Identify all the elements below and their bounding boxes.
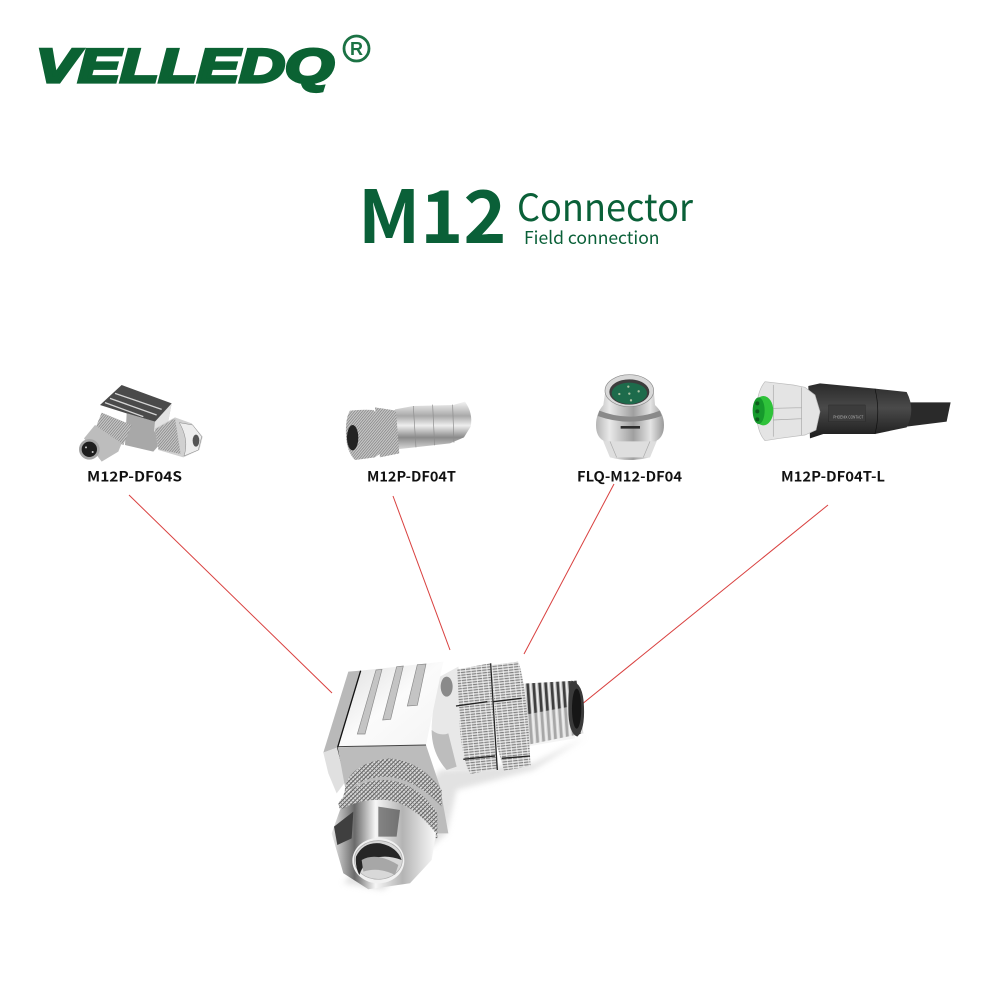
title: M12 Connector	[358, 159, 693, 265]
product: M12P-DF04T-L	[753, 382, 951, 486]
housing top	[338, 662, 443, 747]
gland opening	[352, 838, 404, 883]
title: M12 Connector: Connector	[517, 177, 693, 232]
line to FLQ-M12-DF04	[524, 484, 614, 654]
image: cable connector: PHOENIX CONTACT	[833, 414, 864, 419]
logo: VELLEDQ: VELLEDQ	[36, 39, 334, 92]
line to M12P-DF04T	[393, 496, 450, 650]
housing front face	[323, 747, 347, 793]
image: straight connector small	[346, 402, 471, 460]
main connector photo	[323, 662, 587, 890]
knurled ring 2	[492, 662, 531, 771]
soft shadow	[343, 737, 587, 890]
threaded tip	[517, 681, 584, 746]
logo: VELLEDQ	[36, 36, 369, 92]
image: cable connector	[753, 382, 951, 441]
gland nut	[332, 800, 436, 889]
image: panel mount connector	[596, 375, 664, 460]
knurled ring 1	[457, 663, 497, 774]
housing left face	[323, 671, 361, 753]
housing slots	[357, 664, 426, 734]
label: M12P-DF04T	[367, 466, 456, 486]
line to M12P-DF04T-L	[576, 505, 828, 709]
label: M12P-DF04S	[87, 466, 182, 486]
product: M12P-DF04T	[346, 402, 471, 486]
neck	[432, 667, 473, 770]
logo: VELLEDQ: R	[350, 39, 363, 59]
gland knurled rings	[343, 758, 442, 807]
label: FLQ-M12-DF04	[577, 466, 682, 486]
leader lines	[129, 484, 828, 709]
image: right-angle connector small	[79, 385, 203, 462]
line to M12P-DF04S	[129, 495, 332, 693]
title: M12 Connector: M12	[358, 159, 506, 265]
product: FLQ-M12-DF04	[577, 375, 682, 486]
title: M12 Connector: Field connection	[524, 225, 660, 250]
label: M12P-DF04T-L	[781, 466, 885, 486]
product: M12P-DF04S	[79, 385, 203, 486]
